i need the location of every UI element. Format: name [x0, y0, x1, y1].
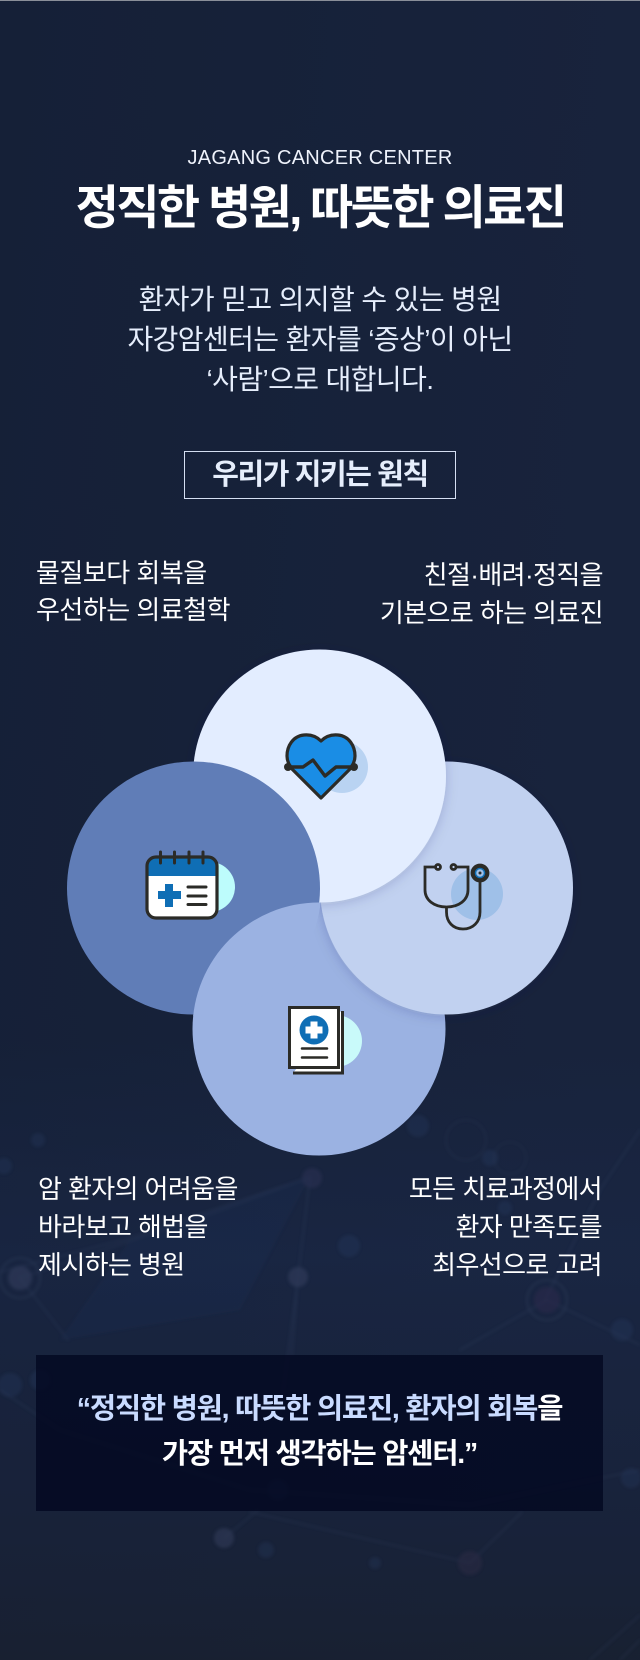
label: top right: 친절·배려·정직을	[424, 560, 603, 590]
label: top left: 우선하는 의료철학	[36, 595, 230, 625]
label: top left: 물질보다 회복을	[36, 558, 207, 588]
intro text	[127, 284, 513, 395]
label: bottom left	[38, 1174, 238, 1280]
label: top left	[36, 558, 230, 625]
quote text: 가장 먼저 생각하는 암센터.”	[162, 1438, 477, 1470]
circle: right	[320, 762, 573, 1014]
label: bottom right: 모든 치료과정에서	[409, 1174, 602, 1204]
intro text: ‘사람’으로 대합니다.	[207, 364, 433, 395]
intro text: 자강암센터는 환자를 ‘증상’이 아닌	[127, 324, 513, 355]
circle: top	[193, 650, 446, 902]
closing quote box	[36, 1355, 603, 1511]
label: bottom left: 바라보고 해법을	[38, 1212, 208, 1242]
principles heading box: 우리가 지키는 원칙	[212, 459, 428, 491]
icon: stethoscope	[425, 864, 503, 929]
label: bottom right: 환자 만족도를	[455, 1212, 602, 1242]
icon: calendar with cross	[147, 852, 235, 918]
icon: medical document	[290, 1008, 362, 1073]
principles heading box	[184, 451, 456, 499]
circle: bottom overlap over left	[193, 902, 320, 1016]
icon: heart with pulse	[284, 735, 368, 798]
intro text: 환자가 믿고 의지할 수 있는 병원	[138, 284, 501, 315]
label: bottom left: 제시하는 병원	[38, 1250, 185, 1280]
quote text	[77, 1393, 562, 1470]
label: bottom left: 암 환자의 어려움을	[38, 1174, 238, 1204]
circle: bottom base	[192, 902, 446, 1156]
label: top right	[380, 560, 603, 628]
title: 정직한 병원, 따뜻한 의료진	[76, 181, 564, 234]
circle: left	[67, 762, 320, 1014]
label: bottom right	[409, 1174, 602, 1280]
header eyebrow: JAGANG CANCER CENTER	[187, 147, 453, 169]
label: top right: 기본으로 하는 의료진	[380, 598, 603, 628]
quote text: “정직한 병원, 따뜻한 의료진, 환자의 회복을	[77, 1393, 562, 1425]
label: bottom right: 최우선으로 고려	[432, 1250, 602, 1280]
